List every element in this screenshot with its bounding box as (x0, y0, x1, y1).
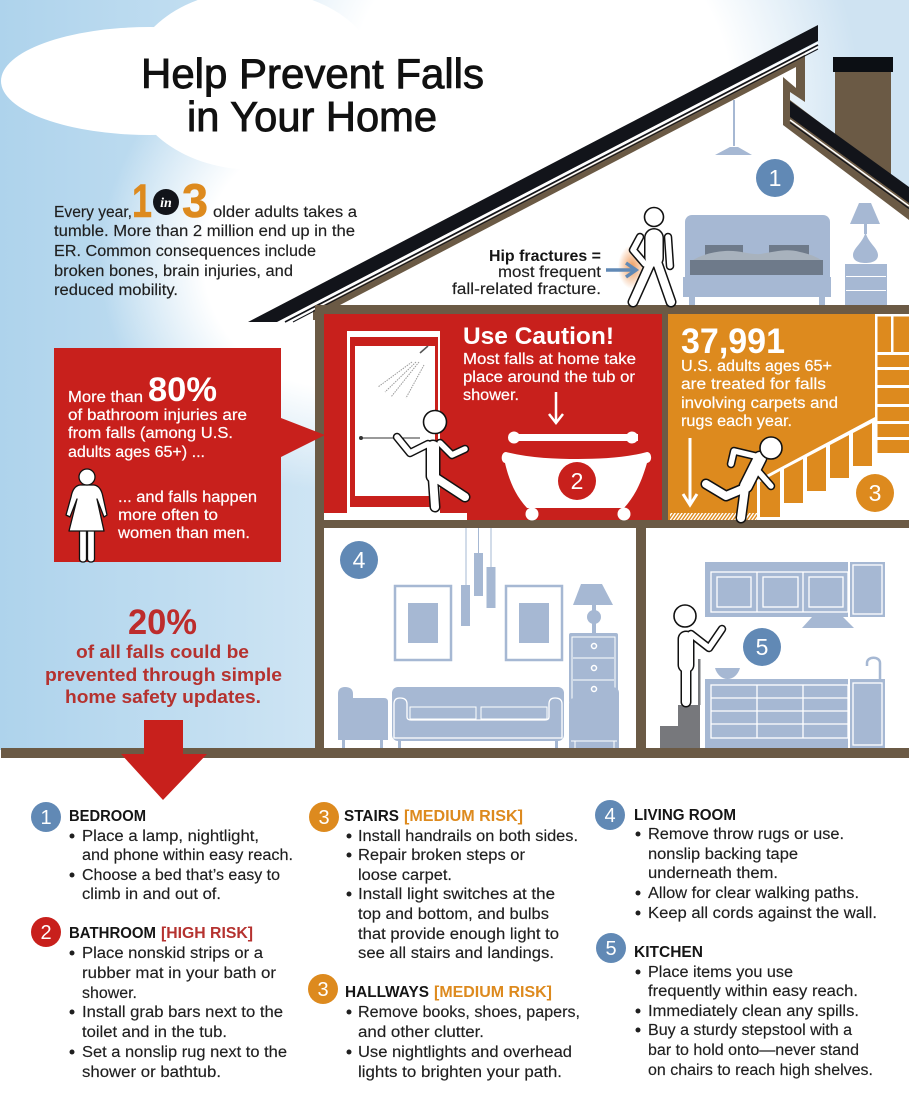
big number 1: 1 (132, 174, 152, 227)
big down arrow (121, 720, 207, 800)
title: Help Prevent Falls (141, 50, 484, 97)
shower (324, 331, 467, 520)
list: kitchen: on chairs to reach high shelves. (648, 1062, 873, 1079)
chimney (833, 57, 893, 180)
bathroom callout: More than (68, 389, 143, 406)
badge 2 (558, 462, 596, 500)
list: bedroom: climb in and out of. (82, 886, 221, 903)
attic interior (340, 67, 909, 305)
list: stairs: Repair broken steps or (358, 847, 525, 864)
list: stairs: [MEDIUM RISK] (404, 808, 523, 825)
bathroom callout: of bathroom injuries are (68, 407, 247, 424)
room 5: kitchen panel (646, 528, 909, 748)
list: hallways: 3 (317, 979, 329, 1001)
badge 1: 1 (769, 165, 781, 191)
list: kitchen: frequently within easy reach. (648, 983, 858, 1000)
list: bathroom: shower. (82, 985, 137, 1002)
stairs text: rugs each year. (681, 413, 792, 430)
cloud (1, 0, 380, 170)
list: bedroom (31, 802, 293, 903)
pendant lights (461, 528, 496, 626)
intro text: 1 in 3: Every year, (54, 204, 132, 221)
house structure brown (313, 52, 909, 320)
list: bathroom: rubber mat in your bath or (82, 965, 276, 982)
fall glow (618, 245, 646, 289)
list: bedroom: Choose a bed that’s easy to (82, 867, 280, 884)
badge 5 (743, 628, 781, 666)
bathroom callout: women than men. (117, 525, 250, 542)
ceiling lamp (715, 100, 752, 155)
list: hallways: [MEDIUM RISK] (434, 984, 552, 1001)
list: hallways: HALLWAYS (345, 984, 429, 1001)
list: stairs: top and bottom, and bulbs (358, 906, 549, 923)
arrow: tub (549, 392, 563, 423)
falling person in bathroom (397, 410, 465, 507)
stairs text: 37,991 (681, 322, 785, 361)
intro text: 1 in 3: older adults takes a (213, 204, 357, 221)
badge 2: 2 (571, 468, 583, 494)
hip fracture person (633, 208, 671, 302)
list: living room: Allow for clear walking paths. (648, 885, 859, 902)
list: bedroom: and phone within easy reach. (82, 847, 293, 864)
left chair (338, 687, 388, 748)
list: living room: Keep all cords against the wall. (648, 905, 877, 922)
list: bedroom: BEDROOM (69, 808, 146, 825)
big number 3: 3 (182, 174, 208, 227)
stairs text: are treated for falls (681, 376, 826, 393)
list: bathroom: BATHROOM (69, 925, 156, 942)
right chair (569, 687, 619, 748)
badge 5: 5 (756, 634, 768, 660)
title (141, 50, 484, 140)
list: bathroom: Set a nonslip rug next to the (82, 1044, 287, 1061)
bathroom callout (54, 348, 325, 562)
list: stairs: 3 (318, 807, 330, 829)
step stool (660, 659, 700, 748)
badge 3: 3 (869, 480, 881, 506)
list: hallways: lights to brighten your path. (358, 1064, 562, 1081)
wall pictures (395, 586, 562, 660)
list: kitchen (596, 933, 873, 1079)
upper cabinets (705, 562, 885, 628)
list: hallways: Remove books, shoes, papers, (358, 1004, 580, 1021)
stat: 20 percent: home safety updates. (65, 687, 261, 707)
list: living room: Remove throw rugs or use. (648, 826, 844, 843)
bathtub (502, 432, 651, 520)
person on stool (674, 605, 722, 702)
intro text: 1 in 3: broken bones, brain injuries, and (54, 263, 293, 280)
badge 1 (756, 159, 794, 197)
badge 4: 4 (353, 547, 366, 573)
stat: 20 percent: prevented through simple (45, 665, 282, 685)
bed (683, 215, 831, 305)
in badge (153, 189, 179, 215)
room 2: bathroom panel (324, 314, 662, 520)
list: kitchen: KITCHEN (634, 944, 703, 961)
list: bathroom: 2 (40, 922, 52, 944)
lower floor walls (315, 305, 909, 758)
bathroom callout: from falls (among U.S. (68, 425, 233, 442)
hip fracture callout (452, 248, 602, 298)
stairs text (681, 322, 838, 430)
list: stairs: Install handrails on both sides. (358, 828, 578, 845)
hip fracture callout: Hip fractures = (489, 248, 601, 265)
list: kitchen: Place items you use (648, 964, 793, 981)
list: bathroom: Install grab bars next to the (82, 1004, 283, 1021)
title: in Your Home (187, 93, 437, 140)
stairs text: U.S. adults ages 65+ (681, 358, 832, 375)
stat: 20 percent: 20% (128, 603, 197, 642)
list: stairs: that provide enough light to (358, 926, 559, 943)
list: bathroom: Place nonskid strips or a (82, 945, 263, 962)
list: hallways: and other clutter. (358, 1024, 484, 1041)
list: kitchen: 5 (605, 938, 617, 960)
icon: woman (66, 469, 107, 562)
badge 4 (340, 541, 378, 579)
hip fracture callout: fall-related fracture. (452, 281, 601, 298)
list: bathroom: shower or bathtub. (82, 1064, 221, 1081)
carpet hatch (670, 513, 758, 520)
list: living room: nonslip backing tape (648, 846, 798, 863)
list: living room: 4 (604, 805, 616, 827)
list: kitchen: Buy a sturdy stepstool with a (648, 1022, 852, 1039)
list: bathroom (31, 917, 287, 1081)
stairs text: involving carpets and (681, 395, 838, 412)
intro text: 1 in 3: ER. Common consequences include (54, 243, 316, 260)
sky background (0, 0, 909, 750)
lamp and dresser (569, 584, 618, 703)
ground line (1, 748, 909, 758)
list: hallways (308, 974, 580, 1081)
list: living room: underneath them. (648, 865, 778, 882)
badge 3 (856, 474, 894, 512)
stairs (757, 314, 909, 520)
list: stairs: loose carpet. (358, 867, 452, 884)
list: bathroom: toilet and in the tub. (82, 1024, 227, 1041)
room 3: stairs panel (668, 314, 909, 520)
list: stairs: STAIRS (344, 808, 399, 825)
use caution text: Use Caution! (463, 323, 614, 350)
list: stairs: Install light switches at the (358, 886, 555, 903)
right roof (790, 101, 909, 208)
stat: 20 percent (45, 603, 282, 707)
intro text: 1 in 3 (54, 174, 357, 299)
arrow: hip (606, 263, 636, 277)
list: hallways: Use nightlights and overhead (358, 1044, 572, 1061)
bathroom callout: more often to (118, 507, 218, 524)
intro text: 1 in 3: reduced mobility. (54, 282, 178, 299)
list: bedroom: 1 (40, 807, 52, 829)
lower cabinets and sink (705, 658, 885, 748)
bathroom callout: adults ages 65+) ... (68, 444, 205, 461)
stat 80%: 80% (148, 371, 217, 409)
stat: 20 percent: of all falls could be (76, 642, 249, 662)
use caution text (463, 323, 636, 404)
room 4: living room panel (324, 528, 636, 748)
list: bathroom: [HIGH RISK] (161, 925, 253, 942)
falling person on stairs (706, 437, 782, 518)
intro text: 1 in 3: tumble. More than 2 million end up in the (54, 223, 355, 240)
list: living room: LIVING ROOM (634, 807, 736, 824)
list: living room (595, 800, 877, 922)
use caution text: place around the tub or (463, 369, 635, 386)
arrow: carpet (683, 438, 697, 505)
use caution text: Most falls at home take (463, 351, 636, 368)
in badge: in (160, 196, 172, 211)
room 1: bedroom (683, 100, 887, 305)
sofa (392, 687, 564, 748)
list: bedroom: Place a lamp, nightlight, (82, 828, 259, 845)
list: stairs: see all stairs and landings. (358, 945, 554, 962)
list: stairs (309, 802, 578, 962)
list: kitchen: bar to hold onto—never stand (648, 1042, 859, 1059)
bedside lamp and nightstand (845, 203, 887, 305)
main roof (248, 25, 818, 322)
list: kitchen: Immediately clean any spills. (648, 1003, 859, 1020)
hip fracture callout: most frequent (498, 264, 602, 281)
use caution text: shower. (463, 387, 519, 404)
bathroom callout: ... and falls happen (118, 489, 257, 506)
